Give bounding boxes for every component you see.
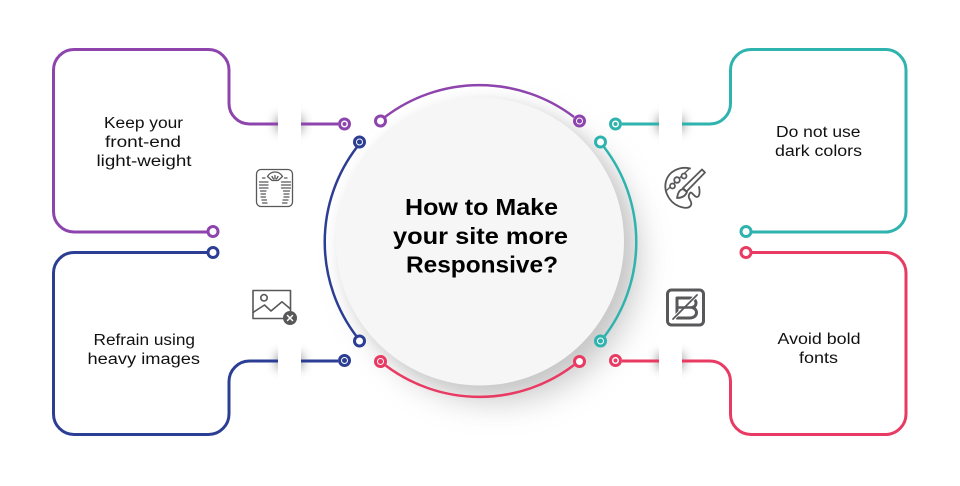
central circle with shadow: [336, 98, 641, 403]
text: do not use dark colors: [775, 124, 862, 160]
icon: paint palette and brush: [665, 168, 705, 208]
icon: weighing scale: [256, 170, 292, 206]
text: refrain using heavy images: Refrain using: [94, 332, 195, 349]
arc: purple top: [376, 85, 584, 126]
icon: image with cross: [253, 290, 297, 325]
panel: dark colors outline: [610, 49, 906, 236]
text: avoid bold fonts: [778, 331, 860, 367]
title: your site more: [393, 223, 568, 249]
connector gap covers: [278, 104, 682, 381]
text: do not use dark colors: Do not use: [776, 124, 860, 141]
text: keep your front-end light-weight: Keep your: [104, 115, 183, 132]
text: keep your front-end light-weight: front-end: [105, 134, 181, 151]
title: How to Make: [405, 194, 558, 220]
text: refrain using heavy images: heavy images: [88, 351, 200, 368]
icon: crossed bold B: [668, 290, 704, 325]
connector gap shadows: [276, 116, 684, 369]
title: Responsive?: [406, 252, 558, 278]
text: avoid bold fonts: Avoid bold: [778, 331, 860, 348]
text: keep your front-end light-weight: [96, 115, 192, 170]
title: [393, 194, 568, 278]
text: avoid bold fonts: fonts: [799, 350, 838, 367]
text: do not use dark colors: dark colors: [775, 143, 862, 160]
panel: bold fonts outline: [610, 248, 906, 434]
arc: teal right: [596, 137, 636, 346]
arc: blue left: [325, 137, 364, 346]
text: refrain using heavy images: [88, 332, 200, 368]
arc: pink bottom: [376, 356, 584, 397]
panel: keep front-end light-weight outline: [53, 49, 349, 236]
panel: refrain heavy images outline: [53, 248, 349, 434]
text: keep your front-end light-weight: light-weight: [96, 153, 192, 170]
